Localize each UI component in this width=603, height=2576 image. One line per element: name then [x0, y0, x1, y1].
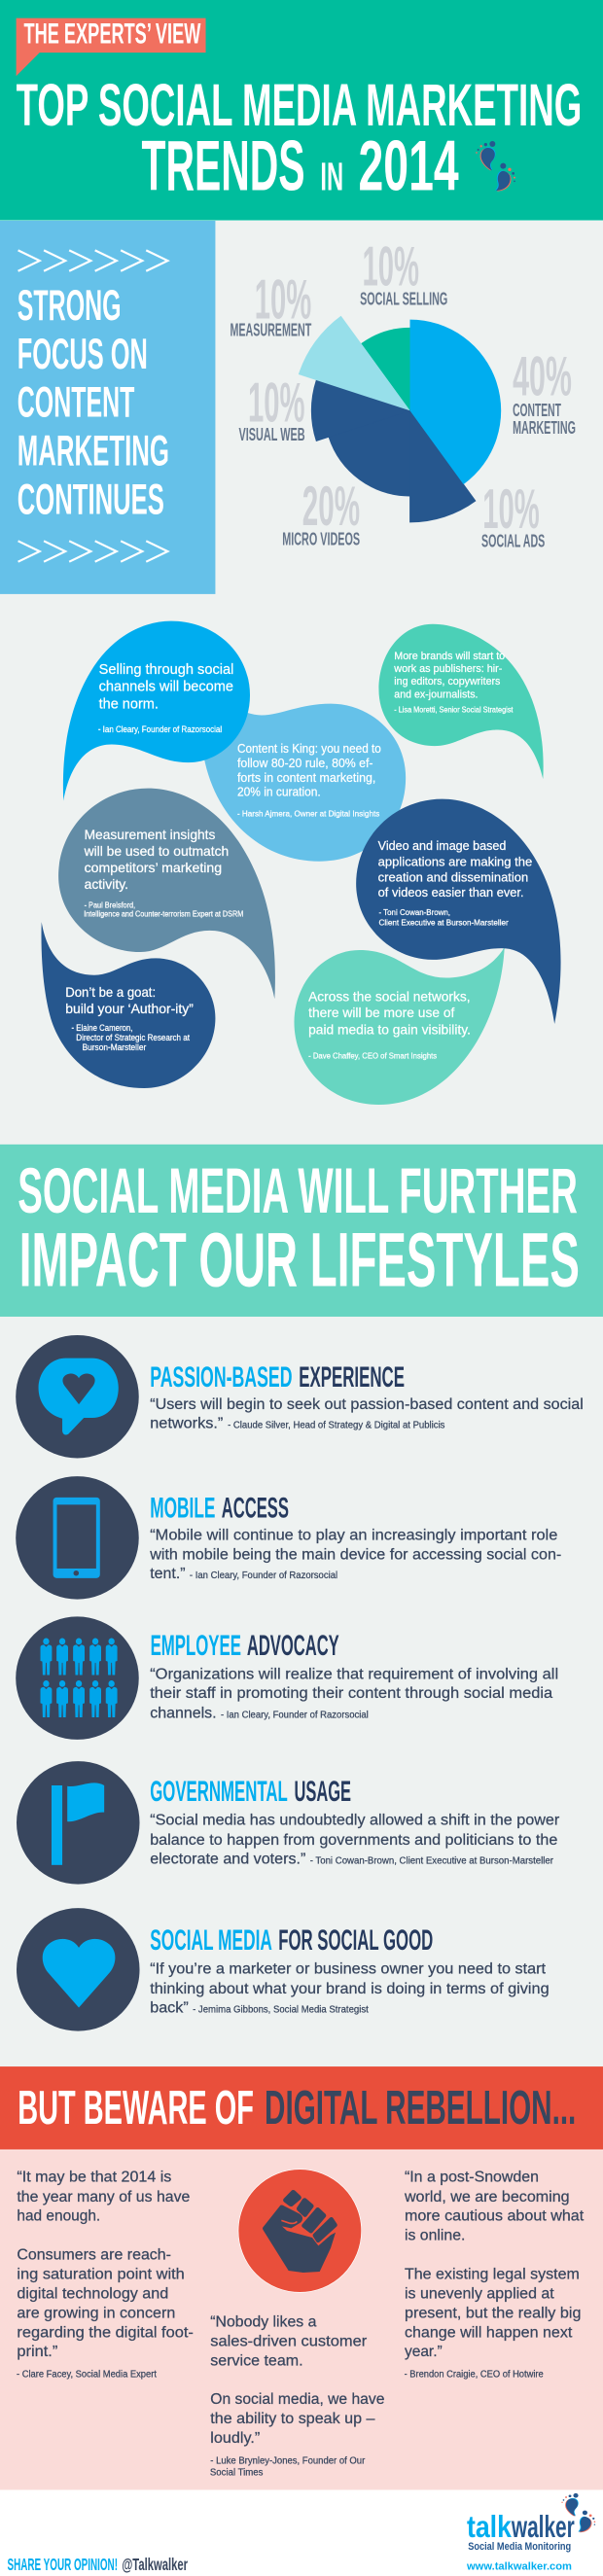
panel heading	[18, 282, 169, 523]
banner: but beware of digital rebellion: BUT BEWARE OF	[18, 2082, 254, 2135]
quote: clare facey: - Clare Facey, Social Media Expert	[17, 2370, 157, 2381]
quote: clare facey	[17, 2170, 194, 2381]
panel heading: CONTINUES	[18, 476, 164, 523]
quote: brendon craigie: year.”	[405, 2344, 443, 2360]
label: content marketing: CONTENT	[513, 401, 561, 420]
bubble: don't be a goat: Burson-Marsteller	[83, 1042, 146, 1052]
icon: group of employees	[16, 1616, 139, 1740]
quote: brendon craigie	[404, 2170, 585, 2381]
label: visual web: VISUAL WEB	[239, 425, 305, 444]
label: social ads: 10%	[482, 478, 540, 541]
item: governmental usage: - Toni Cowan-Brown, Client Executive at Burson-Marsteller	[310, 1856, 554, 1867]
bubble: content is king: - Harsh Ajmera, Owner at Digital Insights	[237, 808, 380, 818]
quote: clare facey: “It may be that 2014 is	[17, 2170, 172, 2186]
label: social selling: SOCIAL SELLING	[360, 290, 447, 309]
item: passion-based experience: PASSION-BASED	[150, 1361, 293, 1394]
bubble: measurement insights: Measurement insights	[85, 827, 215, 842]
bubble: more brands: and ex-journalists.	[394, 688, 478, 700]
label: micro videos: 20%	[302, 476, 360, 538]
bubble: content is king: 20% in curation.	[237, 785, 321, 798]
bubble: across the social networks: paid media to gain visibility.	[308, 1022, 471, 1038]
item: governmental usage	[17, 1761, 559, 1885]
item: employee advocacy: their staff in promoting their content through social media	[150, 1685, 552, 1702]
footer: share your opinion: SHARE YOUR OPINION!	[8, 2555, 118, 2574]
chevrons bottom	[18, 541, 167, 562]
item: mobile access: tent.”	[150, 1566, 186, 1582]
footer: share your opinion: @Talkwalker	[122, 2555, 188, 2574]
logo: talkwalker	[466, 2509, 575, 2573]
item: passion-based experience: - Claude Silver, Head of Strategy & Digital at Publicis	[228, 1421, 444, 1431]
item: social media for social good: SOCIAL MEDIA	[150, 1924, 272, 1957]
label: measurement: 10%	[255, 268, 311, 331]
pie chart	[299, 316, 501, 522]
page background	[0, 221, 603, 2068]
bubble: selling through social: Selling through social	[99, 661, 233, 678]
panel: expert quote bubbles	[41, 621, 561, 1105]
bubble: don't be a goat: Don’t be a goat:	[65, 984, 156, 1000]
bubble: more brands: work as publishers: hir-	[393, 663, 503, 675]
item: mobile access: MOBILE	[150, 1492, 215, 1524]
quote: brendon craigie: The existing legal system	[405, 2266, 580, 2282]
bubble: video and image: Video and image based	[378, 838, 506, 853]
item: governmental usage: USAGE	[294, 1776, 351, 1808]
quote: luke brynley-jones: Social Times	[210, 2467, 263, 2478]
quote: clare facey: digital technology and	[17, 2286, 168, 2303]
quote: brendon craigie: present, but the really big	[405, 2306, 581, 2322]
quote: brendon craigie: - Brendon Craigie, CEO of Hotwire	[405, 2370, 544, 2381]
quote: luke brynley-jones: “Nobody likes a	[210, 2313, 317, 2330]
quote: luke brynley-jones: sales-driven customer	[210, 2334, 367, 2350]
item: social media for social good: FOR SOCIAL GOOD	[278, 1924, 433, 1957]
bubble: content is king: forts in content marketing,	[237, 771, 375, 785]
item: mobile access: “Mobile will continue to play an increasingly important role	[150, 1527, 558, 1543]
label: content marketing	[513, 345, 576, 438]
bubble: across the social networks	[294, 947, 505, 1105]
icon: speech bubble with heart	[16, 1335, 139, 1458]
bubble: video and image: Client Executive at Burson-Marsteller	[378, 917, 509, 927]
quote: clare facey: regarding the digital foot-	[17, 2324, 194, 2341]
label: visual web	[239, 371, 305, 444]
title	[17, 72, 582, 206]
bubble: don't be a goat	[41, 922, 215, 1088]
quote: clare facey: print.”	[17, 2344, 57, 2360]
item: mobile access	[16, 1476, 561, 1600]
flag: the experts' view: THE EXPERTS’ VIEW	[24, 18, 201, 50]
label: micro videos	[282, 476, 360, 549]
quote: luke brynley-jones: - Luke Brynley-Jones, Founder of Our	[210, 2456, 366, 2467]
title: IN	[320, 155, 343, 199]
item: governmental usage: electorate and voters.”	[150, 1852, 305, 1868]
bubble: across the social networks: - Dave Chaffey, CEO of Smart Insights	[308, 1051, 438, 1061]
bubble: selling through social: - Ian Cleary, Founder of Razorsocial	[98, 724, 222, 734]
bubble: selling through social	[63, 621, 250, 801]
item: social media for social good: back”	[150, 2000, 189, 2017]
label: measurement	[230, 268, 311, 340]
item: social media for social good: - Jemima Gibbons, Social Media Strategist	[193, 2005, 369, 2016]
item: employee advocacy: EMPLOYEE	[151, 1630, 241, 1662]
bubble: more brands: More brands will start to	[394, 651, 505, 662]
item: social media for social good: thinking about what your brand is doing in terms of giving	[150, 1981, 550, 1997]
bubble: more brands: - Lisa Moretti, Senior Social Strategist	[394, 706, 514, 715]
item: employee advocacy: channels.	[150, 1705, 217, 1721]
bubble: don't be a goat: - Elaine Cameron,	[72, 1023, 132, 1033]
panel heading: CONTENT	[18, 379, 134, 427]
quote: luke brynley-jones: service team.	[210, 2352, 303, 2369]
bubble: content is king: follow 80-20 rule, 80% ef-	[237, 757, 373, 770]
bubble: across the social networks: there will be more use of	[308, 1005, 455, 1020]
panel heading: STRONG	[18, 282, 122, 330]
bubble: content is king	[204, 704, 406, 862]
banner: social media will further impact our lifestyles	[0, 1145, 603, 1317]
item: employee advocacy: ADVOCACY	[247, 1630, 339, 1662]
item: governmental usage: GOVERNMENTAL	[150, 1776, 288, 1808]
item: governmental usage: balance to happen from governments and politicians to the	[150, 1832, 558, 1849]
bubble: don't be a goat: Director of Strategic Research at	[76, 1033, 190, 1042]
banner: but beware of digital rebellion	[0, 2066, 603, 2149]
item: passion-based experience: networks.”	[150, 1416, 223, 1432]
bubble: video and image: applications are making the	[378, 854, 532, 868]
bubble: measurement insights: will be used to outmatch	[84, 843, 229, 859]
item: employee advocacy	[16, 1616, 558, 1740]
item: passion-based experience: EXPERIENCE	[299, 1361, 405, 1394]
bubble: measurement insights: Intelligence and Counter-terrorism Expert at DSRM	[84, 909, 243, 919]
panel: digital rebellion quotes	[0, 2150, 603, 2489]
quote: brendon craigie: world, we are becoming	[404, 2189, 570, 2205]
quote: clare facey: had enough.	[17, 2208, 100, 2225]
label: social selling	[360, 235, 447, 309]
logo: talkwalker: www.talkwalker.com	[466, 2561, 572, 2573]
label: visual web: 10%	[248, 371, 305, 434]
bubble: video and image: - Toni Cowan-Brown,	[378, 907, 450, 917]
item: employee advocacy: - Ian Cleary, Founder of Razorsocial	[221, 1710, 369, 1720]
quote: clare facey: the year many of us have	[17, 2189, 190, 2205]
quote: brendon craigie: is online.	[405, 2227, 465, 2243]
panel heading: MARKETING	[18, 427, 169, 475]
quote: luke brynley-jones: the ability to speak up –	[210, 2411, 375, 2427]
bubble: measurement insights: competitors’ marketing	[85, 860, 222, 875]
label: micro videos: MICRO VIDEOS	[282, 530, 360, 549]
bubble: more brands	[378, 624, 544, 779]
panel: strong focus on content marketing	[0, 221, 215, 594]
bubble: selling through social: channels will become	[99, 679, 233, 695]
bubble: measurement insights	[58, 789, 275, 999]
title: 2014	[359, 127, 459, 206]
item: social media for social good	[17, 1908, 550, 2031]
icon: flag	[17, 1761, 140, 1885]
quote: brendon craigie: more cautious about what	[405, 2208, 585, 2225]
bubble: selling through social: the norm.	[99, 695, 159, 712]
icon: footprints	[476, 141, 515, 192]
item: mobile access: with mobile being the main device for accessing social con-	[149, 1546, 561, 1563]
item: employee advocacy: “Organizations will realize that requirement of involving all	[150, 1666, 558, 1682]
logo: talkwalker: talk	[467, 2509, 512, 2544]
bubble: video and image: of videos easier than ever.	[378, 885, 524, 900]
icon: logo footprints	[561, 2493, 595, 2532]
bubble: content is king: Content is King: you need to	[237, 742, 381, 756]
label: social ads	[481, 478, 545, 551]
item: passion-based experience: “Users will begin to seek out passion-based content and social	[150, 1396, 584, 1413]
quote: clare facey: Consumers are reach-	[17, 2247, 171, 2264]
icon: mobile phone	[16, 1476, 139, 1600]
item: passion-based experience	[16, 1335, 584, 1458]
quote: luke brynley-jones	[210, 2313, 384, 2478]
label: social selling: 10%	[362, 235, 419, 298]
quote: brendon craigie: change will happen next	[405, 2324, 573, 2341]
quote: luke brynley-jones: loudly.”	[210, 2430, 260, 2447]
quote: clare facey: are growing in concern	[17, 2306, 175, 2322]
bubble: across the social networks: Across the social networks,	[308, 989, 471, 1005]
label: social ads: SOCIAL ADS	[481, 532, 545, 551]
bubble: video and image: creation and dissemination	[378, 869, 528, 884]
item: governmental usage: “Social media has undoubtedly allowed a shift in the power	[150, 1813, 559, 1829]
bubble: measurement insights: activity.	[85, 876, 128, 892]
bubble: more brands: ing editors, copywriters	[394, 676, 501, 688]
bubble: don't be a goat: build your ‘Author-ity”	[65, 1001, 194, 1016]
chevrons top	[18, 250, 167, 271]
bubble: video and image	[356, 799, 561, 1024]
quote: luke brynley-jones: On social media, we have	[210, 2391, 384, 2408]
item: social media for social good: “If you’re a marketer or business owner you need to start	[150, 1961, 547, 1978]
quote: brendon craigie: is unevenly applied at	[405, 2286, 555, 2303]
item: mobile access: ACCESS	[222, 1492, 289, 1524]
panel heading: FOCUS ON	[18, 331, 148, 378]
bubble: measurement insights: - Paul Brelsford,	[85, 900, 135, 910]
icon: raised fist	[238, 2170, 362, 2292]
quote: brendon craigie: “In a post-Snowden	[405, 2170, 539, 2186]
title: TRENDS	[142, 127, 305, 206]
header panel	[0, 0, 603, 221]
item: mobile access: - Ian Cleary, Founder of Razorsocial	[190, 1570, 337, 1581]
flag: the experts' view	[17, 18, 206, 76]
icon: heart	[17, 1908, 140, 2031]
logo: talkwalker: Social Media Monitoring	[468, 2541, 571, 2553]
label: measurement: MEASUREMENT	[230, 321, 311, 340]
quote: clare facey: ing saturation point with	[17, 2266, 185, 2282]
